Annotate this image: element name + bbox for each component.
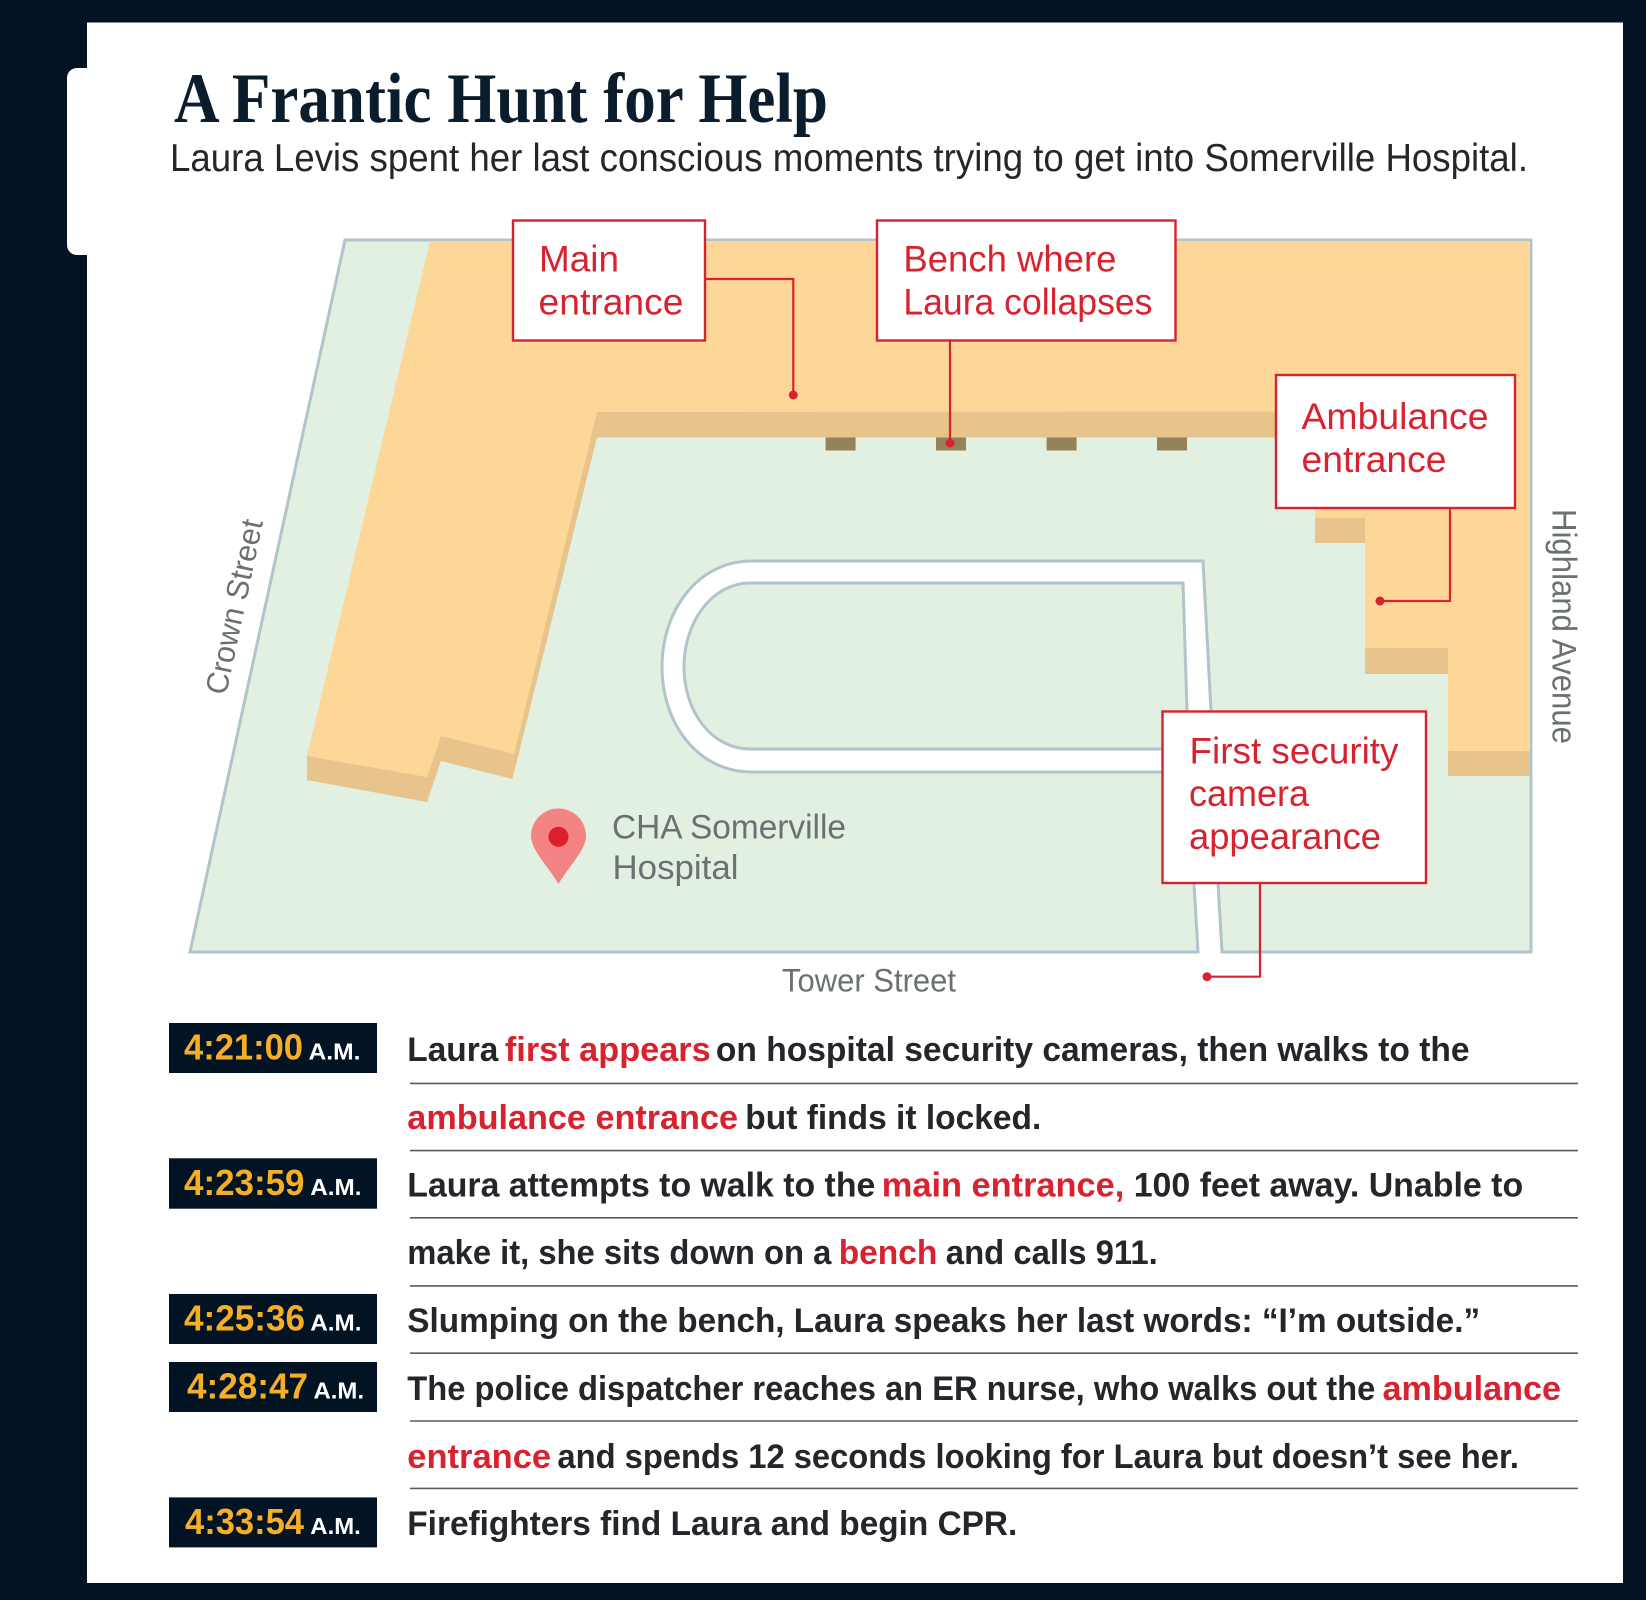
hospital grounds [190,240,1531,952]
building roof [307,241,1530,777]
event text 4: The police dispatcher reaches an ER nurse, who walks out the [407,1370,1375,1408]
callout: first security camera appearance: appearance [1189,816,1381,857]
map of hospital site [190,220,1582,998]
callout: bench [877,220,1176,448]
time stamp 4:33:54 [169,1497,377,1547]
time stamp 4:23:59: A.M. [310,1174,362,1200]
street label: Tower Street: Tower Street [782,962,956,998]
callout: ambulance entrance: entrance [1302,439,1446,480]
callout: first security camera appearance [1162,712,1426,981]
callout: first security camera appearance: camera [1189,773,1309,814]
callout: main entrance: entrance [538,281,684,322]
time stamp 4:33:54: A.M. [310,1513,361,1539]
hospital label [612,808,846,887]
time stamp 4:21:00 [169,1023,377,1073]
time stamp 4:23:59: 4:23:59 [184,1162,304,1203]
callout: first security camera appearance: First security [1190,730,1399,771]
event text 4 [407,1370,1561,1476]
icon: map pin [531,808,586,884]
event text 4: and spends 12 seconds looking for Laura but doesn’t see her. [557,1438,1519,1476]
tab on the left of the panel [67,68,117,255]
event text 3: Slumping on the bench, Laura speaks her last words: “I’m outside.” [407,1302,1480,1340]
time stamp 4:28:47: 4:28:47 [187,1365,308,1406]
event text 2 [407,1166,1523,1272]
event text 2: and calls 911. [946,1234,1158,1272]
event text 1: ambulance entrance [407,1099,738,1137]
hospital label: CHA Somerville [612,808,846,846]
event text 2: make it, she sits down on a [407,1234,832,1272]
event text 1 [407,1031,1470,1137]
callout: bench: Bench where [903,239,1116,280]
event text 1: Laura [407,1031,499,1069]
event text 2: bench [839,1234,937,1272]
time stamp 4:21:00: A.M. [308,1039,360,1065]
callout: ambulance entrance [1276,375,1515,606]
building shadow walls [307,412,1530,802]
title: A Frantic Hunt for Help [174,60,828,138]
time stamp 4:25:36 [169,1294,377,1344]
event text 2: main entrance, [882,1166,1124,1204]
street label: Crown Street: Crown Street [199,516,270,697]
subtitle: Laura Levis spent her last conscious moments trying to get into Somerville Hospital. [170,137,1528,180]
callout: main entrance: Main [539,239,619,280]
event text 1: first appears [505,1031,711,1069]
event text 5: Firefighters find Laura and begin CPR. [407,1505,1017,1543]
street label: Highland Avenue: Highland Avenue [1544,509,1582,744]
callout: ambulance entrance: Ambulance [1302,396,1488,437]
event text 1: but finds it locked. [745,1099,1041,1137]
event text 2: 100 feet away. Unable to [1134,1166,1523,1204]
callout: main entrance [513,220,798,400]
time stamp 4:33:54: 4:33:54 [185,1501,304,1542]
benches [826,438,1187,450]
event text 4: ambulance [1382,1370,1561,1408]
callout: bench: Laura collapses [903,281,1152,322]
time stamp 4:28:47 [169,1362,377,1412]
time stamp 4:28:47: A.M. [314,1377,364,1403]
driveway [662,561,1222,955]
time stamp 4:21:00: 4:21:00 [184,1027,303,1068]
time stamp 4:25:36: A.M. [310,1310,362,1336]
event text 4: entrance [407,1438,551,1476]
event text 2: Laura attempts to walk to the [407,1166,875,1204]
timeline [169,1023,1578,1547]
time stamp 4:23:59 [169,1158,377,1209]
hospital label: Hospital [612,849,738,887]
time stamp 4:25:36: 4:25:36 [184,1298,305,1339]
event text 1: on hospital security cameras, then walks to the [716,1031,1470,1069]
